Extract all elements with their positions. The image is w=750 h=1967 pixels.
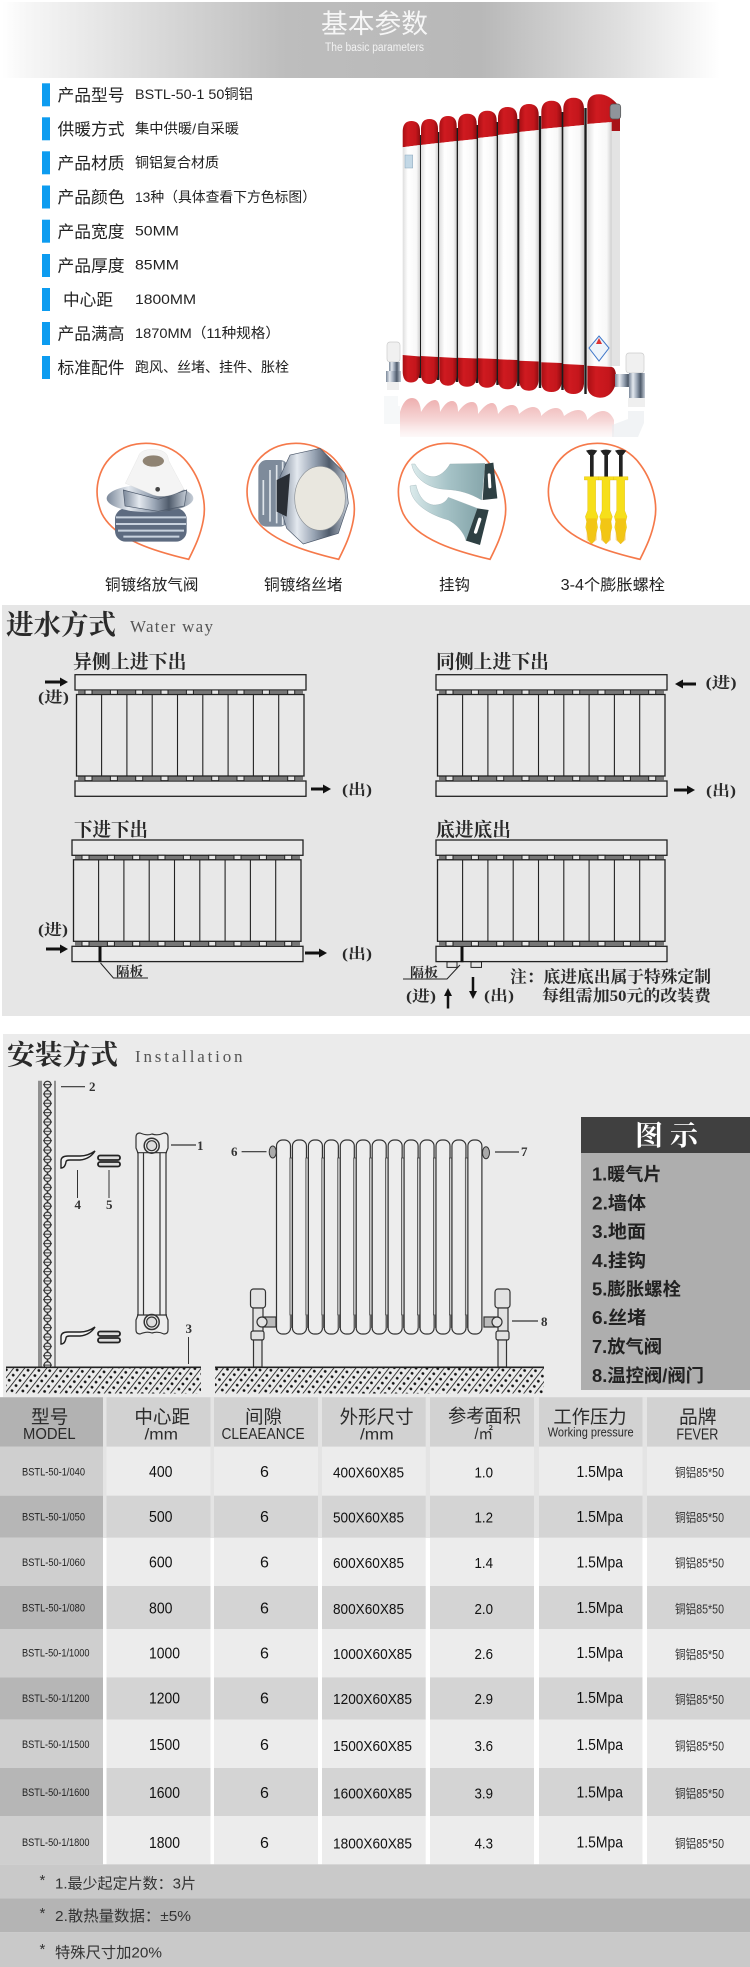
legend items: 5.膨胀螺栓: [592, 1280, 681, 1300]
accessory: expansion bolts: [548, 443, 665, 594]
diagram: front view radiator: [215, 1140, 548, 1394]
spec: standard fittings: 跑风、丝堵、挂件、胀栓: [135, 359, 289, 375]
spec: width: 50MM: [135, 222, 179, 238]
callout: 2 wall: 2: [89, 1079, 96, 1094]
table row 050: 500: [149, 1509, 173, 1526]
left valve: [386, 342, 401, 390]
note: special order surcharge: 注：底进底出属于特殊定制: [510, 966, 711, 986]
column 5: [478, 111, 497, 388]
diagram: same side top in bottom out: (出): [706, 782, 736, 800]
table row 050: [0, 1496, 750, 1538]
table header: /mm: [144, 1426, 178, 1444]
spec: full height: 产品满高: [58, 324, 124, 344]
table header: [0, 1397, 750, 1447]
diagram: same side top in bottom out: (进): [706, 674, 737, 692]
table row 1500: 1.5Mpa: [576, 1737, 623, 1754]
accessory: plug: [247, 443, 354, 594]
note: special order surcharge: [510, 966, 712, 1005]
table row 1200: [0, 1677, 750, 1720]
table row 1500: [0, 1720, 750, 1768]
spec: centre distance: 中心距: [63, 290, 113, 310]
note: heat output tolerance: [0, 1898, 750, 1932]
table row 040: BSTL-50-1/040: [22, 1466, 85, 1478]
label: 3-4个膨胀螺栓: [561, 576, 665, 594]
table row 060: BSTL-50-1/060: [22, 1557, 85, 1569]
certification mark: [589, 336, 609, 361]
sticker left: [405, 155, 413, 168]
table row 050: 1.5Mpa: [576, 1509, 623, 1526]
callout: 6 plug: [231, 1144, 266, 1159]
callout: 8 valve: [512, 1314, 548, 1329]
table header: 型号: [31, 1406, 68, 1428]
table row 1200: 2.9: [474, 1691, 493, 1708]
callout: 1 radiator: [171, 1138, 204, 1153]
table row 050: 1.2: [474, 1510, 493, 1526]
spec: thickness: [42, 254, 179, 277]
diagram: base in base out: (进): [406, 987, 436, 1005]
table row 1800: 1.5Mpa: [576, 1834, 623, 1852]
table row 060: 铜铝85*50: [675, 1556, 724, 1570]
table row 1500: BSTL-50-1/1500: [22, 1739, 90, 1751]
diagram: base in base out: (出): [484, 988, 514, 1004]
note: special size surcharge: *: [40, 1941, 46, 1958]
table row 1500: 铜铝85*50: [675, 1738, 724, 1754]
table row 050: 500X60X85: [333, 1510, 404, 1526]
table header: 参考面积: [448, 1406, 521, 1426]
column 2: [421, 119, 438, 384]
table header: MODEL: [23, 1426, 76, 1443]
table row 1600: 铜铝85*50: [675, 1786, 724, 1801]
table row 1800: 6: [260, 1835, 269, 1852]
table row 1800: 4.3: [474, 1836, 493, 1852]
table row 080: 铜铝85*50: [675, 1602, 724, 1616]
table row 1000: 1000X60X85: [333, 1646, 412, 1663]
air vent valve: [610, 104, 621, 119]
table row 1800: 1800X60X85: [333, 1836, 412, 1852]
heading: installation: 安装方式: [7, 1039, 118, 1070]
note: special order surcharge: 每组需加50元的改装费: [542, 986, 712, 1005]
table header: 外形尺寸: [340, 1406, 414, 1428]
table row 040: 6: [260, 1464, 269, 1481]
column 1: [403, 121, 420, 382]
diagram: opposite side top in bottom out: 异侧上进下出: [73, 650, 186, 673]
callout: 7 vent: 7: [521, 1144, 528, 1159]
table row 1200: BSTL-50-1/1200: [22, 1693, 90, 1705]
table row 080: 2.0: [474, 1601, 493, 1618]
radiator columns: [276, 1140, 482, 1334]
table header: 品牌: [679, 1406, 716, 1428]
callout: 1 radiator: 1: [197, 1138, 204, 1153]
heading: water way: 进水方式: [6, 609, 116, 640]
table: model specifications: [0, 1397, 750, 1865]
diagram: bottom in bottom out: (进): [38, 920, 68, 938]
callout: 5 bolt: 5: [106, 1197, 113, 1212]
note: minimum order: *: [40, 1872, 46, 1889]
diagram: bottom in bottom out: (出): [342, 946, 372, 962]
table row 1800: [0, 1816, 750, 1864]
table row 060: 600X60X85: [333, 1555, 404, 1572]
table row 040: 铜铝85*50: [675, 1465, 724, 1480]
legend items: 1.暖气片: [592, 1164, 662, 1184]
spec: model: 产品型号: [58, 86, 124, 105]
diagram: bottom in bottom out: [38, 819, 372, 979]
radiator side view: [136, 1133, 168, 1334]
table row 060: 600: [149, 1554, 173, 1572]
panel: water way: [2, 605, 750, 1016]
callout: 3 floor: 3: [186, 1321, 192, 1336]
table row 1200: 1.5Mpa: [576, 1690, 623, 1707]
legend items: 2.墙体: [592, 1194, 646, 1214]
table row 050: BSTL-50-1/050: [22, 1512, 85, 1524]
spec: colour: 13种（具体查看下方色标图）: [135, 189, 316, 205]
table header: FEVER: [676, 1426, 718, 1444]
table row 050: 6: [260, 1509, 269, 1526]
table row 060: [0, 1538, 750, 1586]
subtitle: the basic parameters: The basic parameters: [325, 42, 424, 54]
table row 1800: 铜铝85*50: [675, 1836, 724, 1851]
table row 1000: BSTL-50-1/1000: [22, 1648, 90, 1660]
diagram: base in base out: 底进底出: [436, 818, 511, 841]
table row 040: [0, 1447, 750, 1496]
spec: centre distance: [42, 288, 196, 311]
legend items: 4.挂钩: [592, 1251, 646, 1271]
table row 1600: 6: [260, 1785, 269, 1802]
table row 1000: [0, 1629, 750, 1677]
plug 6: [269, 1146, 276, 1158]
column 8: [541, 101, 562, 392]
table header: 中心距: [134, 1406, 190, 1428]
heading english: water way: Water way: [130, 617, 214, 636]
spec: width: 产品宽度: [58, 222, 125, 241]
spec: standard fittings: [42, 356, 289, 379]
table row 080: 800X60X85: [333, 1601, 404, 1618]
spec: model: [42, 83, 253, 106]
table row 080: 800: [149, 1600, 173, 1618]
spec: material: 产品材质: [58, 154, 124, 173]
callout: 8 valve: 8: [541, 1314, 548, 1329]
spec: standard fittings: 标准配件: [58, 358, 124, 378]
valve left: [250, 1289, 276, 1367]
panel: accessories: [97, 443, 665, 594]
lower hook: [61, 1327, 95, 1344]
table row 1200: 1200: [149, 1690, 180, 1708]
table header: /mm: [360, 1426, 394, 1444]
legend title: 图 示: [635, 1120, 700, 1152]
diagram: bottom in bottom out: 下进下出: [74, 819, 148, 841]
note: heat output tolerance: 2.散热量数据：±5%: [55, 1908, 191, 1925]
upper bolt: [98, 1156, 120, 1166]
title: basic parameters: 基本参数: [321, 9, 428, 39]
label: 铜镀络丝堵: [264, 575, 342, 594]
table row 050: 铜铝85*50: [675, 1510, 724, 1525]
note: minimum order: [0, 1864, 750, 1898]
table header: /㎡: [474, 1425, 493, 1443]
spec: full height: [42, 322, 280, 345]
floor hatch left: [6, 1367, 201, 1394]
panel: notes: [0, 1864, 750, 1967]
column 3: [439, 116, 457, 386]
spec: colour: 产品颜色: [58, 188, 125, 207]
accessory: air release valve: [97, 443, 204, 594]
floor hatch right: [215, 1367, 544, 1394]
legend items: 3.地面: [592, 1222, 646, 1242]
right valve: [615, 353, 645, 407]
table row 1200: 铜铝85*50: [675, 1692, 724, 1707]
spec: thickness: 85MM: [135, 256, 179, 272]
table header: Working pressure: [548, 1426, 634, 1440]
table row 040: 1.5Mpa: [576, 1464, 623, 1481]
table row 040: 400: [149, 1464, 173, 1481]
table row 080: [0, 1586, 750, 1629]
spec: model: BSTL-50-1 50铜铝: [135, 86, 253, 102]
diagram: wall mount side view: [6, 1079, 204, 1394]
table row 080: 1.5Mpa: [576, 1600, 623, 1617]
table row 1600: 1.5Mpa: [576, 1784, 623, 1802]
table row 1000: 1000: [149, 1646, 180, 1662]
table row 060: 1.5Mpa: [576, 1554, 623, 1572]
table row 1600: 3.9: [474, 1786, 493, 1802]
legend items: [592, 1164, 704, 1386]
reflection: [384, 396, 644, 437]
diagram: opposite side top in bottom out: [38, 650, 372, 798]
diagram: bottom in bottom out: 隔板: [116, 964, 143, 979]
accessory: hooks: [398, 443, 506, 594]
column 4: [458, 114, 477, 387]
panel: installation: [3, 1034, 750, 1397]
table row 1200: 6: [260, 1690, 269, 1708]
diagram: opposite side top in bottom out: (进): [38, 688, 69, 706]
table row 1500: 1500: [149, 1737, 180, 1754]
legend items: 7.放气阀: [592, 1337, 662, 1357]
note: minimum order: 1.最少起定片数：3片: [55, 1876, 196, 1892]
label: 挂钩: [439, 576, 470, 594]
table header: CLEAEANCE: [222, 1426, 305, 1443]
label: 铜镀络放气阀: [105, 575, 198, 594]
table row 1000: 铜铝85*50: [675, 1647, 724, 1662]
callout: 4 hook: 4: [74, 1197, 82, 1212]
note: special size surcharge: 特殊尺寸加20%: [55, 1944, 162, 1962]
table row 080: 6: [260, 1600, 269, 1618]
table row 1500: 6: [260, 1737, 269, 1754]
spec: centre distance: 1800MM: [135, 291, 196, 307]
spec: material: 铜铝复合材质: [135, 154, 219, 170]
spec: heating mode: 供暖方式: [58, 120, 125, 139]
spec: heating mode: [42, 117, 239, 140]
table row 040: 1.0: [474, 1464, 493, 1482]
spec: material: [42, 151, 219, 174]
callout: 3 floor: [186, 1321, 192, 1364]
table row 1800: 1800: [149, 1835, 180, 1852]
valve right: [484, 1289, 510, 1367]
table row 060: 6: [260, 1554, 269, 1572]
column 7: [519, 104, 539, 391]
table header: 间隙: [245, 1406, 282, 1428]
spec: width: [42, 220, 179, 243]
table row 1600: BSTL-50-1/1600: [22, 1787, 90, 1799]
heading english: installation: Installation: [135, 1047, 243, 1066]
spec: heating mode: 集中供暖/自采暖: [135, 120, 239, 136]
legend items: 8.温控阀/阀门: [592, 1365, 704, 1386]
panel: basic parameters header: [2, 2, 750, 78]
diagram: same side top in bottom out: 同侧上进下出: [436, 650, 549, 673]
table row 040: 400X60X85: [333, 1464, 404, 1482]
note: heat output tolerance: *: [40, 1905, 46, 1922]
callout: 4 hook: [74, 1170, 82, 1212]
callout: 5 bolt: [106, 1170, 113, 1212]
table row 1600: [0, 1768, 750, 1816]
note: special size surcharge: [0, 1932, 750, 1967]
column 6: [498, 107, 517, 389]
table row 1600: 1600: [149, 1785, 180, 1802]
air vent 7: [482, 1147, 490, 1159]
table row 1000: 6: [260, 1646, 269, 1662]
table row 1000: 1.5Mpa: [576, 1645, 623, 1662]
table row 1600: 1600X60X85: [333, 1786, 412, 1802]
column 9: [563, 98, 584, 394]
table row 1500: 1500X60X85: [333, 1738, 412, 1755]
upper hook: [61, 1151, 95, 1168]
diagram: same side top in bottom out: [436, 650, 737, 800]
diagram: base in base out: 隔板: [410, 965, 438, 980]
legend items: 6.丝堵: [592, 1308, 646, 1328]
lower bolt: [98, 1332, 120, 1342]
table row 1000: 2.6: [474, 1646, 493, 1663]
table row 1200: 1200X60X85: [333, 1691, 412, 1708]
table row 1800: BSTL-50-1/1800: [22, 1837, 90, 1849]
table row 080: BSTL-50-1/080: [22, 1602, 85, 1614]
column 10: [587, 94, 618, 398]
legend panel: [581, 1117, 750, 1390]
table header: 工作压力: [553, 1406, 627, 1428]
callout: 2 wall: [61, 1079, 96, 1094]
table row 1500: 3.6: [474, 1738, 493, 1755]
diagram: base in base out: [403, 818, 667, 1008]
callout: 6 plug: 6: [231, 1144, 238, 1159]
spec: colour: [42, 186, 316, 208]
spec: thickness: 产品厚度: [58, 256, 125, 276]
spec: full height: 1870MM（11种规格）: [135, 325, 280, 341]
product photo: radiator: [384, 94, 645, 437]
callout: 7 vent: [495, 1144, 528, 1159]
wall: [39, 1081, 56, 1367]
table row 060: 1.4: [474, 1555, 493, 1572]
panel: specification list: [42, 83, 316, 379]
diagram: opposite side top in bottom out: (出): [342, 782, 372, 798]
